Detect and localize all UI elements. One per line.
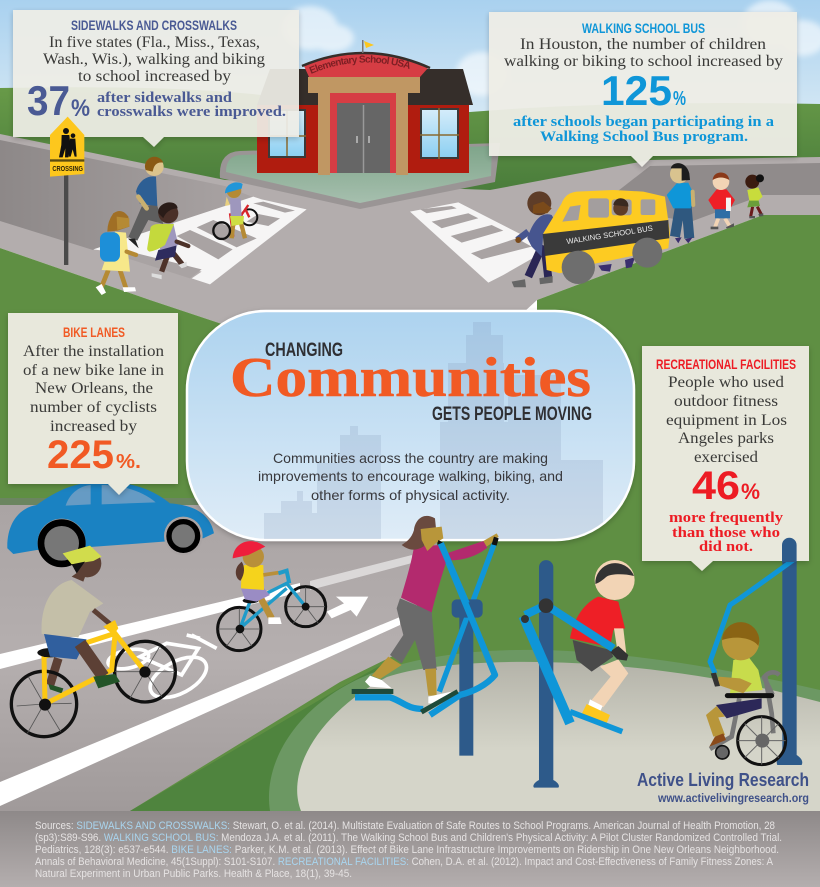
clouds xyxy=(282,0,820,96)
callout: walking school bus: In Houston, the number of children xyxy=(520,36,766,53)
intro text xyxy=(258,450,563,503)
callout: walking school bus: Walking School Bus program. xyxy=(540,129,748,145)
callout: bike lanes: number of cyclists xyxy=(30,399,157,416)
child with bicycle xyxy=(213,182,257,239)
post top overlapping callout xyxy=(782,538,797,562)
sources footer: Pediatrics, 128(3): e537-e544. BIKE LANES: Parker, K.M. et al. (2013). Effect of Bike Lane Infrastructure Improvements on Ridership in One New Orleans Neighborhood. xyxy=(35,844,779,856)
callout: recreational facilities: % xyxy=(741,479,760,504)
callout: walking school bus: after schools began participating in a xyxy=(513,114,775,130)
foot plates xyxy=(352,689,459,714)
lower ground xyxy=(0,215,820,811)
crossing sign xyxy=(50,117,84,265)
woman walking xyxy=(512,191,557,287)
callout: recreational facilities: Angeles parks xyxy=(678,430,774,447)
car wheels xyxy=(38,517,203,567)
yellow frame xyxy=(44,633,145,704)
stepper arms xyxy=(525,605,613,648)
callout: bike lanes xyxy=(8,313,178,495)
walls xyxy=(257,105,469,173)
school bus xyxy=(543,190,670,284)
girl with blue backpack xyxy=(96,211,136,295)
entrance xyxy=(308,77,420,175)
title: Communities xyxy=(230,347,591,409)
car windows xyxy=(66,485,156,506)
upper road network xyxy=(0,134,820,325)
bike wheels xyxy=(11,641,175,737)
sources footer: Natural Experiment in Urban Public Parks. Health & Place, 18(1), 39-45. xyxy=(35,868,352,880)
car xyxy=(7,482,214,567)
flag xyxy=(362,40,374,53)
callout: bike lanes: of a new bike lane in xyxy=(23,362,164,379)
lane arrow xyxy=(327,597,368,618)
distant hills xyxy=(0,87,820,200)
post xyxy=(533,560,559,788)
school bus: WALKING SCHOOL BUS xyxy=(566,224,653,246)
bus wheels xyxy=(562,238,662,284)
child with lime backpack xyxy=(147,202,188,279)
callout: sidewalks and crosswalks: Wash., Wis.), walking and biking xyxy=(43,51,265,68)
post cap xyxy=(452,599,483,618)
rear bar xyxy=(439,542,495,692)
child in bus xyxy=(613,198,628,216)
intro text: Communities across the country are making xyxy=(273,450,548,466)
callout: bike lanes: 225 xyxy=(47,433,114,477)
lead adult xyxy=(667,163,695,243)
front bar over torso xyxy=(441,543,467,603)
sky background xyxy=(0,0,820,135)
small girl xyxy=(745,174,764,218)
cyclist: girl on blue bike xyxy=(218,541,326,651)
callout: sidewalks and crosswalks: crosswalks were improved. xyxy=(97,104,286,120)
callout: recreational facilities: more frequently xyxy=(669,510,784,526)
fitness equipment and woman on elliptical xyxy=(352,516,499,756)
callout: recreational facilities: outdoor fitness xyxy=(674,393,778,410)
title: GETS PEOPLE MOVING xyxy=(432,404,592,425)
fitness equipment and boy on stepper xyxy=(521,560,635,788)
sources footer xyxy=(0,811,820,887)
callout: walking school bus: 125 xyxy=(601,67,672,114)
bus band xyxy=(543,220,669,256)
roof xyxy=(257,69,473,105)
woman head xyxy=(402,516,437,550)
crosswalk left xyxy=(93,197,307,284)
callout: recreational facilities: exercised xyxy=(694,449,758,466)
callout: walking school bus xyxy=(489,12,797,167)
central title bubble xyxy=(187,311,634,540)
window left xyxy=(268,109,306,158)
bike lane lines xyxy=(0,555,412,806)
callout: recreational facilities: People who used xyxy=(668,374,784,391)
intro text: other forms of physical activity. xyxy=(311,487,510,503)
callout: walking school bus: WALKING SCHOOL BUS xyxy=(582,20,705,36)
branding xyxy=(637,770,809,805)
school lawn xyxy=(220,143,500,209)
sign arch: Elementary School USA xyxy=(309,55,410,74)
walking school bus group xyxy=(512,163,764,287)
callout: walking school bus: walking or biking to school increased by xyxy=(504,53,783,70)
woman torso and arm xyxy=(401,541,487,612)
callout: bike lanes: increased by xyxy=(50,418,137,435)
hidden child feet xyxy=(598,257,635,272)
woman legs xyxy=(390,598,437,670)
bike lane symbol xyxy=(106,635,217,706)
callout: sidewalks and crosswalks: In five states (Fla., Miss., Texas, xyxy=(49,34,260,51)
bus windows xyxy=(562,198,655,222)
body xyxy=(42,580,103,637)
post xyxy=(459,612,473,756)
wheelchair child xyxy=(706,622,786,765)
callout: recreational facilities: than those who xyxy=(672,525,780,541)
crossing sign: CROSSING xyxy=(52,164,83,173)
callout: recreational facilities: equipment in Los xyxy=(666,412,787,429)
head and helmet xyxy=(72,563,90,582)
hand and grip xyxy=(483,533,499,547)
adult walking xyxy=(128,157,164,248)
callout: bike lanes: New Orleans, the xyxy=(35,380,153,397)
fitness equipment and child in wheelchair xyxy=(706,558,802,765)
sources footer: Sources: SIDEWALKS AND CROSSWALKS: Stewart, O. et al. (2014). Multistate Evaluation of Safe Routes to School Programs. American Journal of Health Promotion, 28 xyxy=(35,820,775,832)
callout: recreational facilities xyxy=(642,346,809,571)
crosswalk right xyxy=(410,202,538,283)
cyclist: child on yellow bike xyxy=(11,546,175,737)
boy xyxy=(570,560,635,723)
callout: sidewalks and crosswalks: SIDEWALKS AND CROSSWALKS xyxy=(71,17,237,33)
title: CHANGING xyxy=(265,340,343,361)
sign figures xyxy=(59,128,77,157)
blue handle xyxy=(710,560,793,673)
callout: sidewalks and crosswalks: 37 xyxy=(27,77,70,124)
callout: recreational facilities: did not. xyxy=(699,539,753,555)
callout: bike lanes: After the installation xyxy=(23,343,164,360)
sources footer: Annals of Behavioral Medicine, 45(1Suppl): S101-S107. RECREATIONAL FACILITIES: Cohen, D.A. et al. (2012). Impact and Cost-Effectiveness of Family Fitness Zones: A xyxy=(35,856,774,868)
callout: bike lanes: BIKE LANES xyxy=(63,324,125,340)
callout: bike lanes: %. xyxy=(116,451,141,473)
callout: sidewalks and crosswalks: to school increased by xyxy=(78,68,231,85)
callout: sidewalks and crosswalks: after sidewalks and xyxy=(97,90,232,106)
boy with book xyxy=(708,172,735,229)
post xyxy=(777,558,802,765)
school building xyxy=(257,40,473,175)
far leg xyxy=(50,658,58,685)
window right xyxy=(420,108,459,159)
callout: sidewalks and crosswalks xyxy=(13,10,299,147)
callout: sidewalks and crosswalks: % xyxy=(71,95,90,122)
pedestrians crossing xyxy=(96,157,257,295)
callout: walking school bus: % xyxy=(673,88,686,110)
skyline xyxy=(264,322,603,540)
title xyxy=(230,340,592,425)
park plaza xyxy=(269,650,820,811)
callout: recreational facilities: 46 xyxy=(692,464,740,508)
foot rails xyxy=(355,543,495,715)
intro text: improvements to encourage walking, biking, and xyxy=(258,468,563,484)
